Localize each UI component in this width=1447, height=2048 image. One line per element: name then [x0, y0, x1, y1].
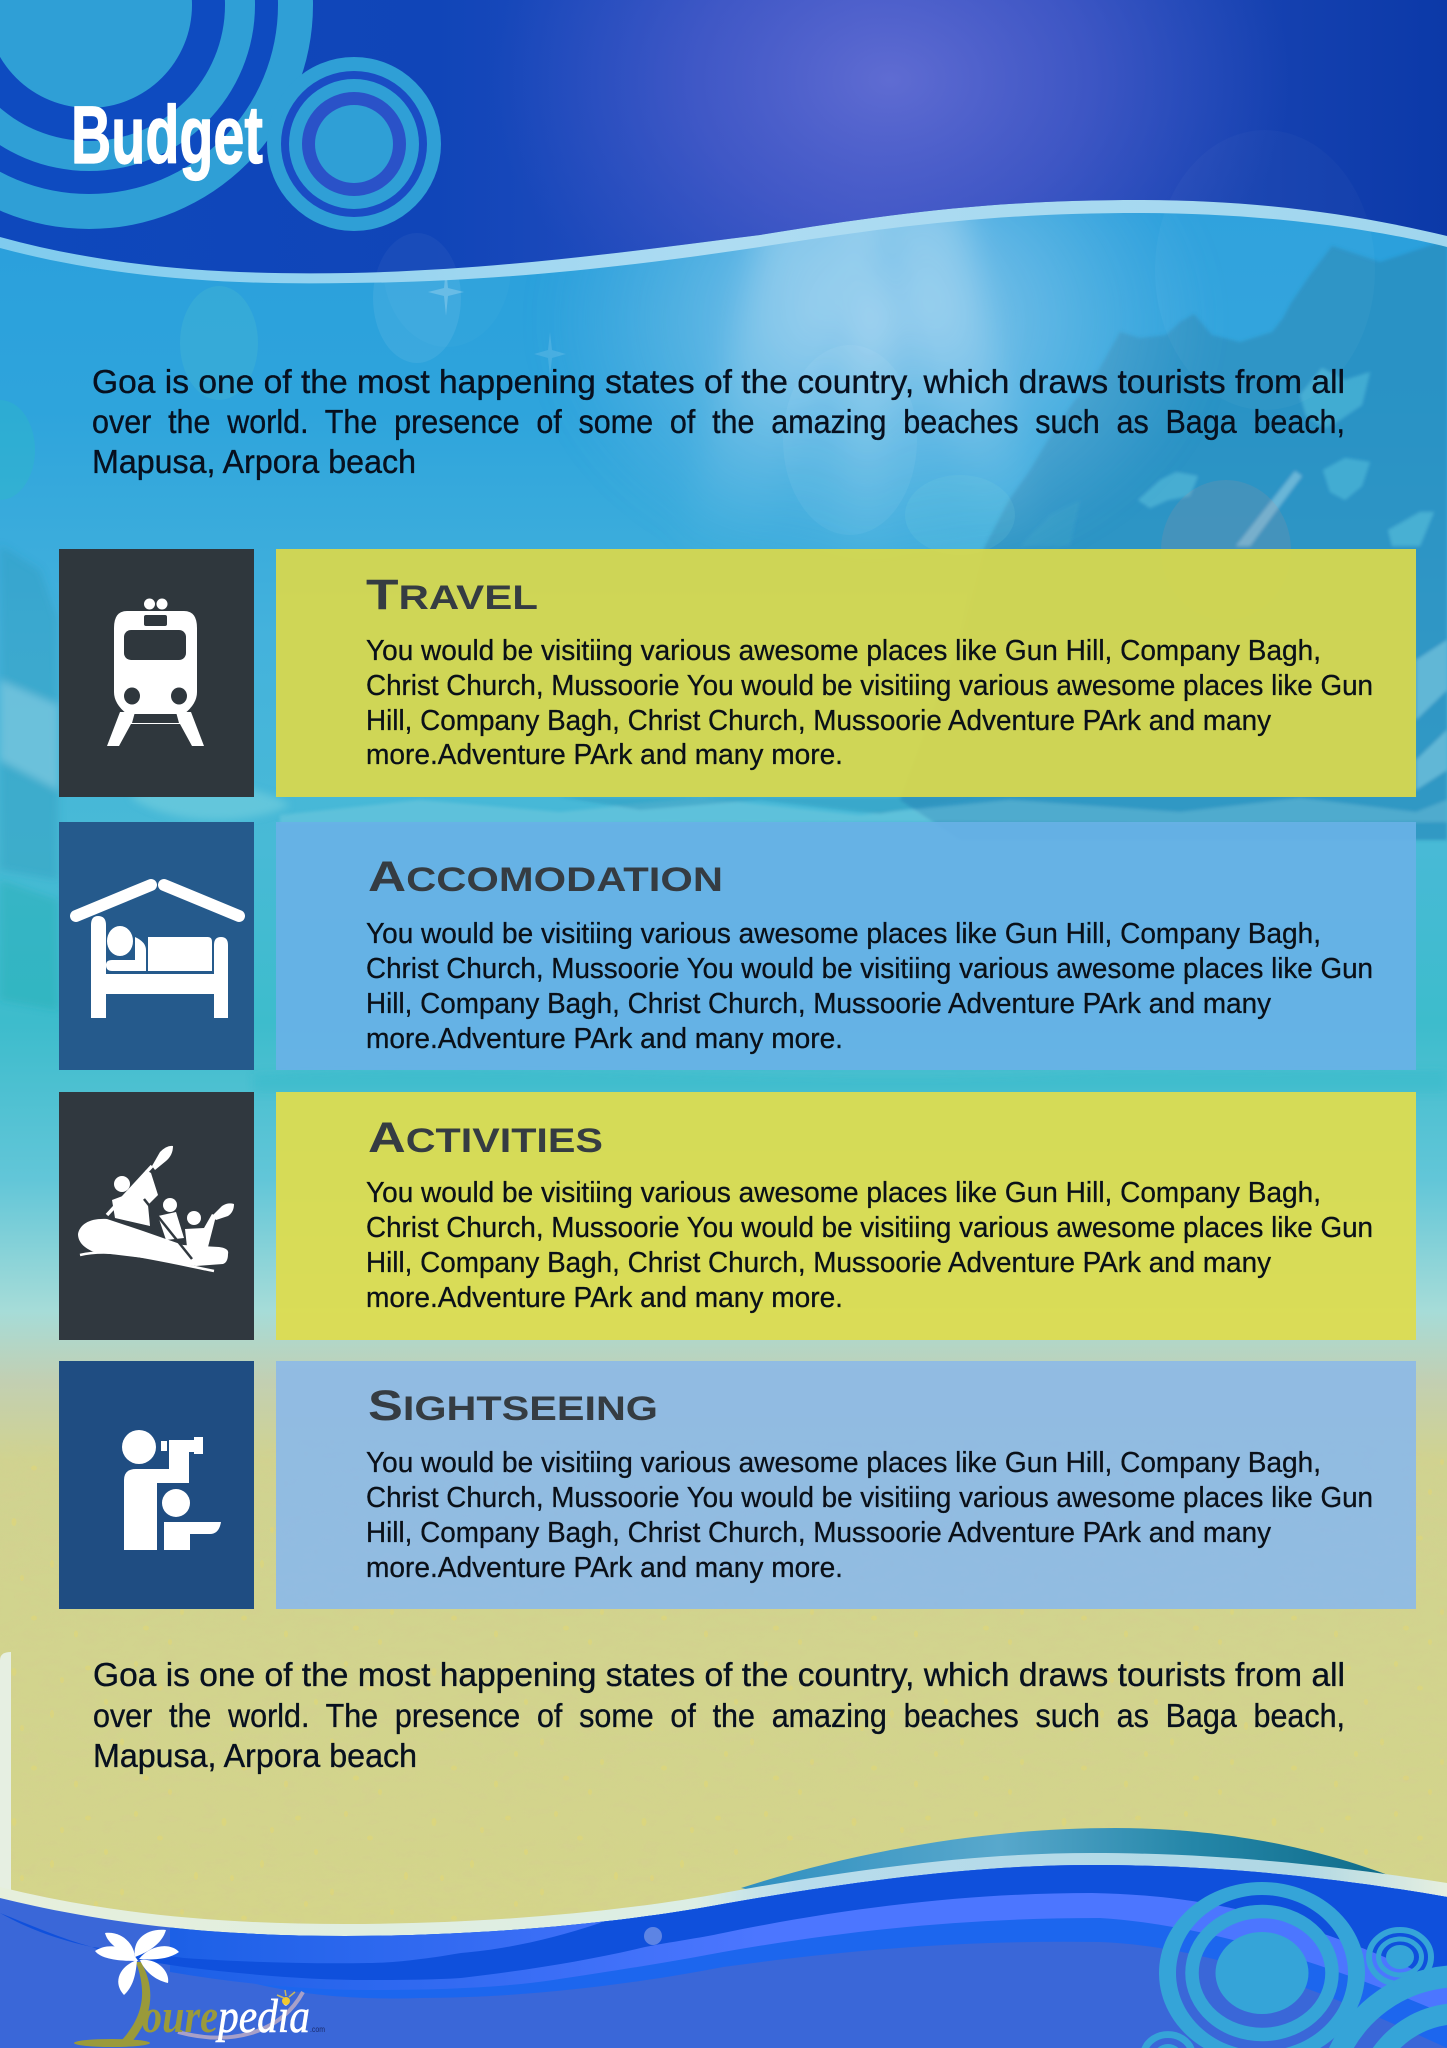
body text: travel: more.Adventure PArk and many more.	[366, 739, 843, 771]
intro text: over the world. The presence of some of the amazing beaches such as Baga beach,	[92, 403, 1345, 440]
body text: sightseeing: Hill, Company Bagh, Christ Church, Mussoorie Adventure PArk and many	[366, 1517, 1271, 1549]
intro text: Mapusa, Arpora beach	[92, 443, 416, 480]
body text: accomodation	[366, 918, 1373, 1055]
body text: activities: Christ Church, Mussoorie You would be visitiing various awesome places like Gun	[366, 1212, 1373, 1244]
body text: accomodation: Hill, Company Bagh, Christ Church, Mussoorie Adventure PArk and many	[366, 988, 1271, 1020]
panel: activities	[276, 1092, 1416, 1340]
body text: activities: You would be visitiing various awesome places like Gun Hill, Company Bagh,	[366, 1177, 1321, 1209]
body text: accomodation: Christ Church, Mussoorie You would be visitiing various awesome places like Gun	[366, 953, 1373, 985]
logo: tourepedia wordmark: pedia	[215, 1990, 310, 2043]
body text: sightseeing: You would be visitiing various awesome places like Gun Hill, Company Bagh,	[366, 1447, 1321, 1479]
icon box: binoculars	[59, 1361, 254, 1609]
heading: activities: ACTIVITIES	[368, 1114, 603, 1162]
logo: tourepedia wordmark: .com	[310, 2025, 325, 2034]
body text: travel: Christ Church, Mussoorie You would be visitiing various awesome places like Gun	[366, 670, 1373, 702]
left edge pale strip	[0, 1652, 11, 1900]
footer blue wave	[0, 1828, 1447, 2048]
body text: accomodation: You would be visitiing various awesome places like Gun Hill, Company Bagh,	[366, 918, 1321, 950]
row: activities	[59, 1092, 1416, 1340]
body text: travel: Hill, Company Bagh, Christ Church, Mussoorie Adventure PArk and many	[366, 705, 1271, 737]
body text: sightseeing: Christ Church, Mussoorie You would be visitiing various awesome places like Gun	[366, 1482, 1373, 1514]
logo: tourepedia wordmark: oure	[142, 1990, 218, 2043]
closing text: Mapusa, Arpora beach	[93, 1737, 417, 1774]
intro text	[92, 363, 1345, 480]
closing text	[93, 1656, 1345, 1774]
row: accomodation	[59, 822, 1416, 1070]
body text: activities: Hill, Company Bagh, Christ Church, Mussoorie Adventure PArk and many	[366, 1247, 1271, 1279]
body text: activities: more.Adventure PArk and many more.	[366, 1282, 843, 1314]
body text: travel	[366, 635, 1373, 771]
row: travel	[59, 549, 1416, 797]
body text: activities	[366, 1177, 1373, 1314]
header blue wave	[0, 0, 1447, 284]
heading: travel: TRAVEL	[366, 571, 538, 619]
icon box: rafting	[59, 1092, 254, 1340]
body text: sightseeing	[366, 1447, 1373, 1584]
panel: accomodation	[276, 822, 1416, 1070]
decoration: large concentric circles	[0, 0, 313, 229]
body text: travel: You would be visitiing various awesome places like Gun Hill, Company Bagh,	[366, 635, 1321, 667]
logo: tourepedia wordmark	[142, 1990, 325, 2043]
closing text: over the world. The presence of some of the amazing beaches such as Baga beach,	[93, 1697, 1345, 1734]
closing text: Goa is one of the most happening states of the country, which draws tourists from all	[93, 1656, 1345, 1693]
row: sightseeing	[59, 1361, 1416, 1609]
panel: travel	[276, 549, 1416, 797]
background: sun rays and lens flares	[0, 213, 1291, 549]
title: Budget	[71, 90, 263, 181]
background: mountains	[0, 240, 1447, 1092]
intro text: Goa is one of the most happening states of the country, which draws tourists from all	[92, 363, 1345, 400]
panel: sightseeing	[276, 1361, 1416, 1609]
heading: sightseeing: SIGHTSEEING	[368, 1382, 658, 1430]
decoration: footer concentric circles	[1142, 1882, 1447, 2048]
body text: sightseeing: more.Adventure PArk and many more.	[366, 1552, 843, 1584]
icon box: train	[59, 549, 254, 797]
body text: accomodation: more.Adventure PArk and many more.	[366, 1023, 843, 1055]
decoration: small concentric circles	[267, 57, 441, 231]
heading: accomodation: ACCOMODATION	[368, 853, 723, 901]
logo: tourepedia palm tree	[74, 1930, 179, 2047]
background: meadow grass texture	[0, 1440, 1447, 1940]
icon box: bed	[59, 822, 254, 1070]
